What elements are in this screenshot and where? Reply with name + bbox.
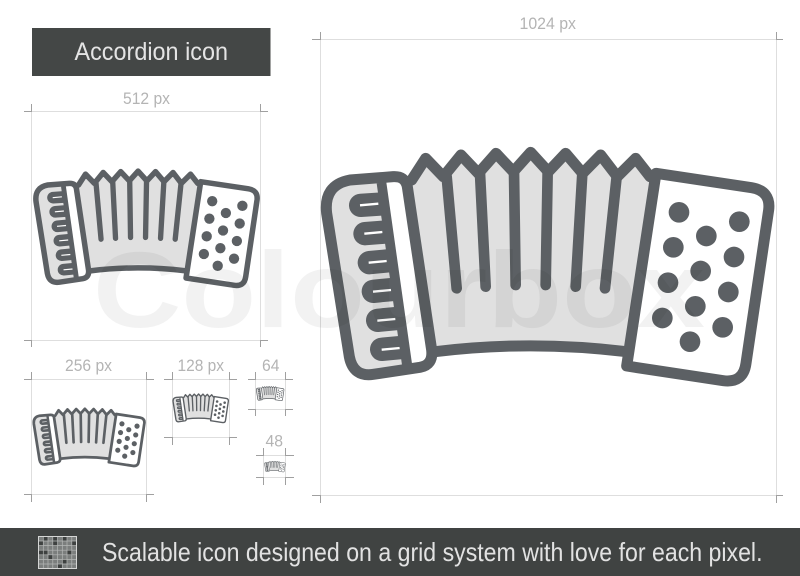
watermark: Colourbox <box>93 229 705 350</box>
panel: 128 px icon size <box>164 356 237 445</box>
size label: 128 px: 128 px <box>178 356 224 375</box>
size label: 1024 px: 1024 px <box>520 14 576 33</box>
guide frame: 256 px <box>24 372 154 502</box>
icon: accordion 512 px <box>36 171 257 285</box>
title: Accordion icon <box>74 38 228 66</box>
panel: 1024 px icon size <box>312 14 783 503</box>
title banner <box>32 28 270 76</box>
panel: 64 px icon size <box>248 356 293 416</box>
guide frame: 128 px <box>164 372 237 445</box>
panel: 48 px icon size <box>256 432 294 485</box>
panel: 512 px icon size <box>24 89 268 347</box>
size label: 48: 48 <box>266 432 283 451</box>
icon: accordion 128 px <box>173 394 228 423</box>
guide frame: 512 px <box>24 104 268 347</box>
footer bar <box>0 528 800 576</box>
size label: 64: 64 <box>262 356 280 375</box>
icon: accordion 256 px <box>34 409 144 466</box>
icon: pixel grid <box>38 536 76 568</box>
guide frame: 48 px <box>256 448 294 485</box>
icon: accordion 1024 px <box>326 152 769 381</box>
size label: 512 px: 512 px <box>123 89 170 108</box>
guide frame: 1024 px <box>312 32 783 503</box>
icon: accordion 64 px <box>256 386 284 401</box>
panel: 256 px icon size <box>24 356 154 502</box>
icon: accordion 48 px <box>265 461 285 472</box>
guide frame: 64 px <box>248 372 293 416</box>
size label: 256 px: 256 px <box>65 356 112 375</box>
